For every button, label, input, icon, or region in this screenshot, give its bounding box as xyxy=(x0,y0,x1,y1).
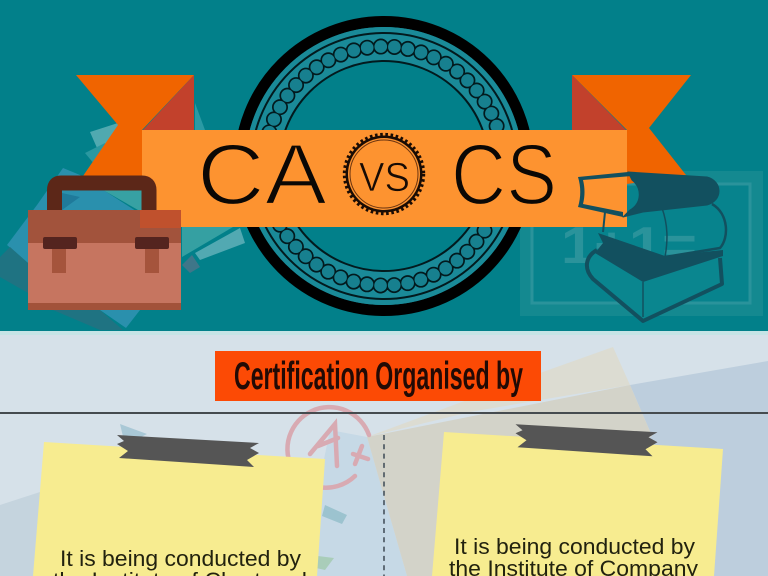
title: CS: CS xyxy=(451,127,557,223)
text: CS note xyxy=(449,534,698,576)
background papers behind briefcase xyxy=(0,103,245,330)
heading: certification organised by: Certification Organised by xyxy=(234,355,523,398)
panel: CA sticky note xyxy=(33,435,325,576)
tape: CS note xyxy=(516,424,658,456)
panel: CS sticky note xyxy=(432,424,723,576)
text: CA note: It is being conducted by xyxy=(60,546,301,571)
vs seal xyxy=(344,134,424,214)
icon: briefcase xyxy=(28,183,181,310)
blackboard background: 1+1= xyxy=(561,217,697,275)
heading: certification organised by xyxy=(215,351,541,401)
tape: CA note xyxy=(117,435,259,467)
text: CS note: It is being conducted by xyxy=(454,534,695,559)
icon: A+ grade mark xyxy=(287,407,369,488)
blackboard background xyxy=(520,171,763,316)
medallion ring xyxy=(240,22,528,310)
left ribbon tail xyxy=(76,75,194,176)
vertical dashed divider xyxy=(383,435,385,576)
panel: lower section background xyxy=(0,335,768,576)
right ribbon tail xyxy=(572,75,691,184)
panel: teal header xyxy=(0,0,768,335)
icon: stack of books xyxy=(578,172,726,321)
horizontal divider xyxy=(0,412,768,414)
orange title banner xyxy=(142,127,627,227)
title: CA: CA xyxy=(197,127,328,223)
vs seal: VS xyxy=(359,154,410,200)
